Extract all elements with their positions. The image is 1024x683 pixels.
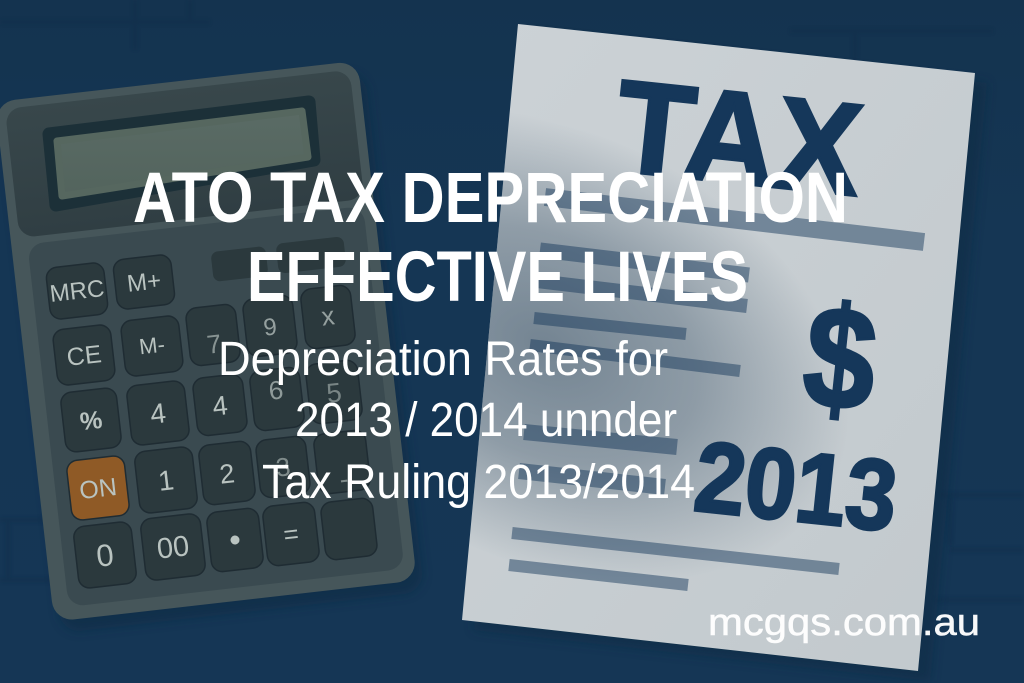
key: CE: [52, 324, 116, 386]
document sheet: [462, 24, 975, 671]
key: equals: [262, 501, 320, 567]
key: 1: [134, 446, 198, 514]
key: 5: 5: [325, 377, 343, 409]
key: 2: [198, 440, 256, 506]
blank key 1: [210, 246, 269, 282]
document year: 2013: [690, 420, 902, 553]
key: equals: =: [282, 518, 300, 550]
title: [133, 159, 848, 317]
key: M+: [112, 254, 176, 310]
key: ON: ON: [78, 473, 118, 505]
key: 4 right: 4: [211, 390, 229, 422]
key: 6: [249, 366, 305, 432]
tax document: [462, 24, 987, 681]
key: multiply: [300, 284, 356, 350]
key: minus: -: [338, 463, 350, 494]
blank key 2: [276, 236, 346, 274]
display bezel: [49, 102, 314, 205]
key: 3: [255, 435, 311, 499]
document text lines: [509, 197, 924, 585]
key: minus: [313, 429, 371, 497]
document shading: [462, 24, 975, 671]
key: decimal point: [206, 507, 264, 573]
key: 9: [242, 294, 298, 358]
key: multiply: x: [320, 300, 336, 332]
title: EFFECTIVE LIVES: [247, 238, 748, 317]
key: 3: 3: [274, 451, 292, 483]
key: 00: [140, 513, 206, 581]
key: 00: 00: [155, 530, 191, 566]
display panel: [5, 70, 364, 238]
key: 4 left: [126, 380, 190, 446]
calculator shadow: [2, 72, 424, 633]
document shadow: [474, 34, 987, 681]
key: 1: 1: [157, 464, 176, 497]
key: 4 left: 4: [149, 397, 168, 430]
key: MRC: MRC: [48, 275, 106, 308]
key: 7: 7: [205, 328, 223, 360]
key: 0: [73, 521, 137, 589]
key: MRC: [45, 262, 109, 320]
subtitle: Tax Ruling 2013/2014: [262, 456, 695, 509]
key: CE: CE: [65, 340, 103, 372]
calculator body: [0, 61, 417, 622]
key: 6: 6: [267, 374, 285, 406]
key: 0: 0: [95, 537, 116, 574]
key: percent: %: [78, 406, 104, 436]
key: 4 right: [192, 373, 248, 437]
key: M+: M+: [126, 267, 162, 298]
key: M-: [120, 315, 184, 377]
display screen: [57, 111, 308, 196]
key: blank: [320, 497, 378, 561]
subtitle: [218, 333, 695, 509]
key: 5: [305, 359, 363, 425]
key: 2: 2: [218, 458, 236, 490]
subtitle: Depreciation Rates for: [218, 333, 668, 386]
key: 9: 9: [262, 313, 278, 342]
calculator: [0, 61, 424, 633]
document word: TAX: TAX: [609, 52, 869, 224]
key: ON: [66, 455, 130, 521]
keypad panel: [27, 206, 404, 607]
subtitle: 2013 / 2014 unnder: [295, 394, 677, 447]
key: percent: [60, 387, 122, 453]
key: M-: M-: [138, 332, 166, 359]
key: 7: [185, 303, 241, 367]
title: ATO TAX DEPRECIATION: [133, 159, 848, 238]
website address: mcgqs.com.au: [708, 602, 980, 644]
document dollar sign: $: [796, 273, 884, 442]
